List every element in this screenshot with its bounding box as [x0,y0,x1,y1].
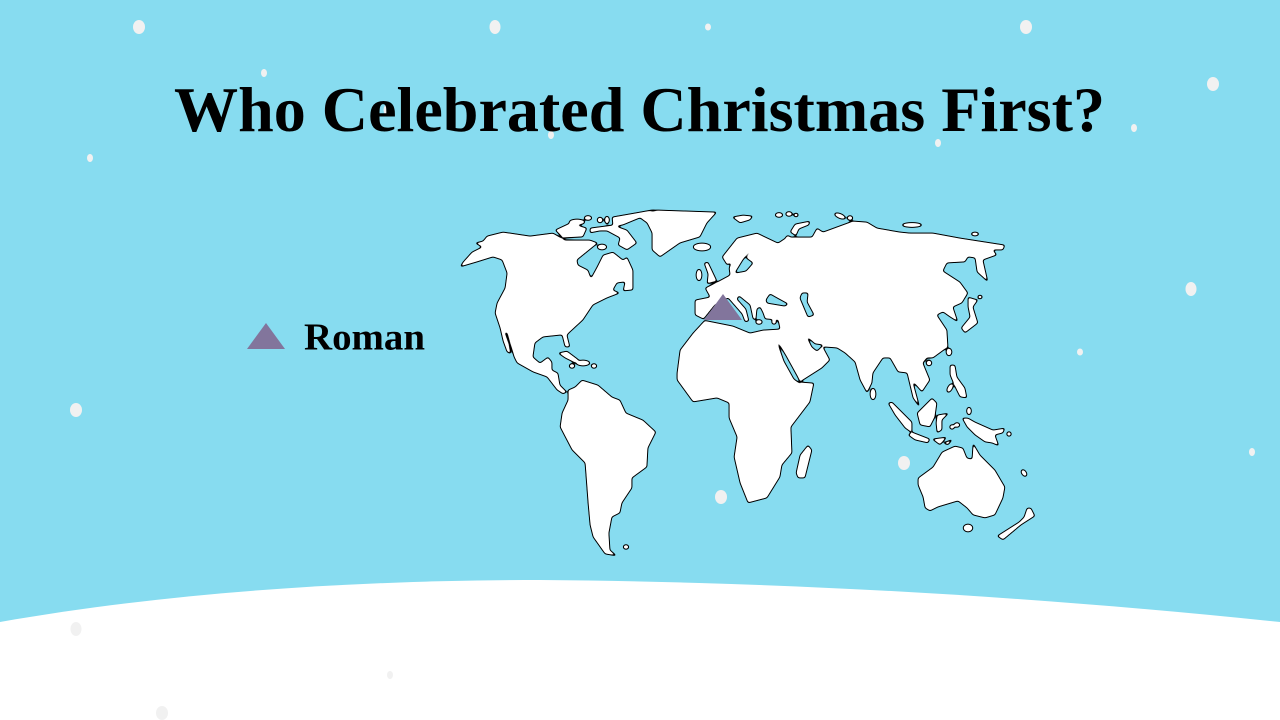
New Zealand [997,508,1035,540]
Greenland [640,210,717,257]
marker: Roman location on map [704,294,742,320]
snowy hill [0,580,1280,720]
legend: Roman [247,316,425,358]
Madagascar [796,445,812,478]
Canadian Arctic islands [555,209,657,250]
legend label: Roman [304,316,425,358]
Australia [918,443,1005,518]
Japan and East Asian islands [870,295,982,400]
Indonesia and New Guinea [888,398,1028,478]
Britain, Ireland and Iceland [693,243,717,284]
Caribbean islands [558,351,597,368]
Crete and Cyprus [756,320,776,324]
world map [460,209,1035,556]
Eurasia and Africa [677,221,1005,503]
South America [560,380,656,556]
Tasmania [963,524,973,532]
Falkland Islands [623,544,629,550]
North America [460,232,633,394]
title: Who Celebrated Christmas First? [174,74,1105,145]
legend triangle [247,323,285,349]
Arctic Eurasian islands [732,211,979,240]
